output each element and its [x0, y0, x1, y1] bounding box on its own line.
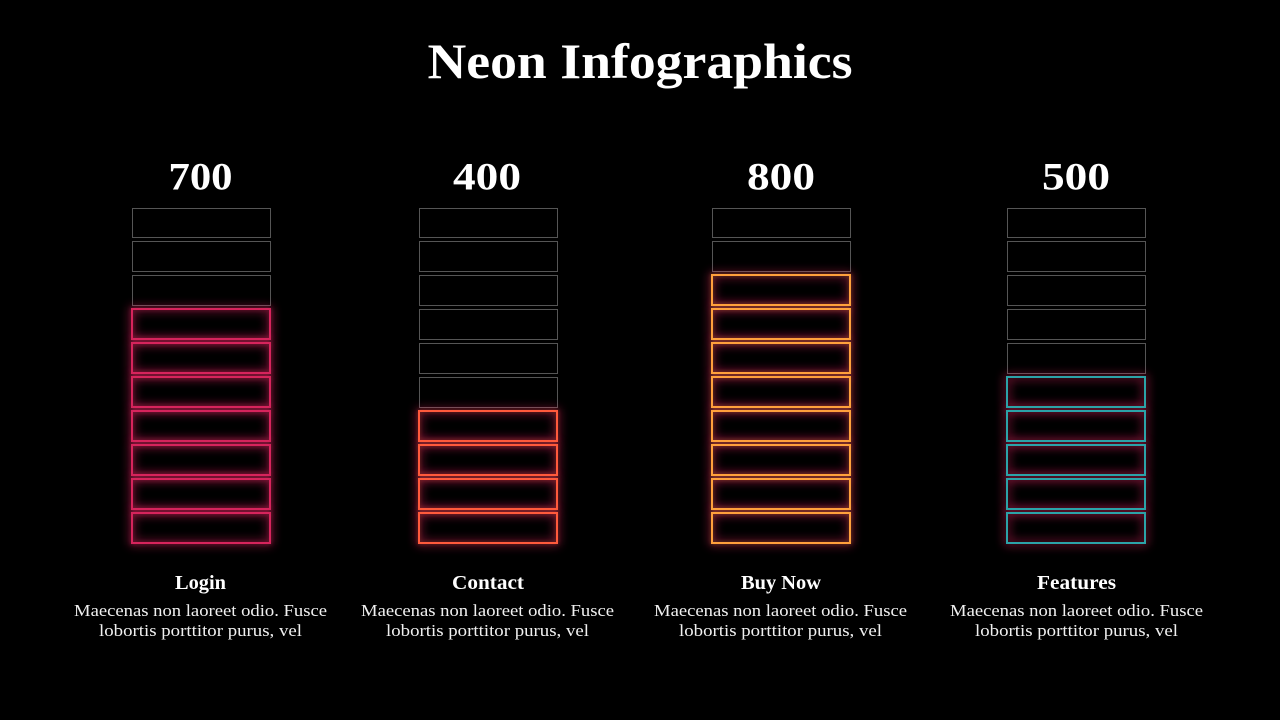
bar: 7 of 10 lit, pink	[132, 208, 270, 543]
description: features	[950, 601, 1203, 640]
panel: features	[950, 156, 1203, 640]
title: Neon Infographics	[428, 33, 852, 89]
description: login: lobortis porttitor purus, vel	[99, 621, 302, 640]
label: login: Login	[175, 572, 226, 594]
label: buy now: Buy Now	[741, 572, 822, 594]
panel: contact	[361, 156, 614, 640]
value: 500: 500	[1042, 156, 1110, 198]
description: contact: lobortis porttitor purus, vel	[386, 621, 589, 640]
value: 800: 800	[747, 156, 815, 198]
description: features: lobortis porttitor purus, vel	[975, 621, 1178, 640]
description: contact: Maecenas non laoreet odio. Fusce	[361, 601, 614, 620]
value: 700: 700	[168, 156, 232, 198]
description: login: Maecenas non laoreet odio. Fusce	[74, 601, 327, 620]
panel: buy now	[654, 156, 907, 640]
bar: 8 of 10 lit, orange	[712, 208, 850, 543]
value: 400: 400	[453, 156, 521, 198]
description: buy now: Maecenas non laoreet odio. Fusce	[654, 601, 907, 620]
label: features: Features	[1037, 572, 1116, 594]
panel: login	[74, 156, 327, 640]
description: buy now: lobortis porttitor purus, vel	[679, 621, 882, 640]
description: buy now	[654, 601, 907, 640]
label: contact: Contact	[452, 572, 524, 594]
bar: 5 of 10 lit, teal	[1007, 208, 1146, 543]
bar: 4 of 10 lit, red-orange	[419, 208, 558, 543]
description: contact	[361, 601, 614, 640]
description: login	[74, 601, 327, 640]
description: features: Maecenas non laoreet odio. Fusce	[950, 601, 1203, 620]
